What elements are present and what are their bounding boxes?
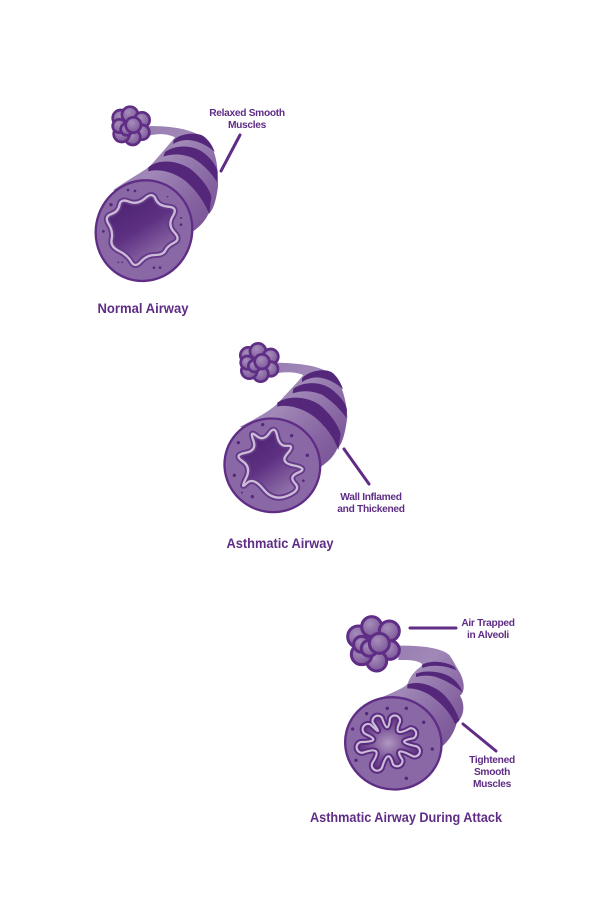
lumen dark edge bbox=[107, 195, 178, 265]
label: tightened smooth muscles: Muscles bbox=[473, 779, 512, 790]
icon: asthmatic alveoli cluster bbox=[240, 343, 278, 382]
lumen dark edge bbox=[357, 715, 420, 771]
dark muscle band top bbox=[422, 662, 457, 670]
lumen light lining bbox=[239, 430, 302, 498]
label: tightened smooth muscles: Smooth bbox=[474, 767, 510, 778]
label: relaxed smooth muscles: Muscles bbox=[228, 120, 267, 131]
tube outer wall bbox=[335, 686, 452, 800]
heading: asthmatic airway during attack: Asthmatic Airway During Attack bbox=[310, 809, 502, 825]
bronchus tube body bbox=[367, 646, 464, 748]
label: air trapped in alveoli: Air Trapped bbox=[461, 618, 515, 629]
dark muscle band middle bbox=[163, 146, 218, 182]
panel: asthmatic airway during attack bbox=[310, 617, 515, 825]
illustration: normal airway tube bbox=[82, 126, 218, 295]
dark muscle band middle bbox=[416, 671, 462, 692]
lumen dark edge bbox=[239, 430, 302, 498]
dark muscle band top bbox=[173, 134, 215, 152]
tube outer wall bbox=[211, 405, 333, 526]
dark muscle band top bbox=[302, 370, 343, 389]
heading: asthmatic airway: Asthmatic Airway bbox=[226, 535, 334, 551]
wall dots bbox=[233, 423, 309, 498]
dark muscle band lower bbox=[148, 161, 211, 214]
illustration: asthmatic airway tube bbox=[211, 363, 347, 526]
panel: normal airway bbox=[82, 107, 285, 316]
label line: wall inflamed bbox=[344, 449, 369, 484]
illustration: attack airway tube bbox=[335, 646, 464, 800]
label: relaxed smooth muscles: Relaxed Smooth bbox=[209, 108, 285, 119]
panel: asthmatic airway bbox=[211, 343, 405, 551]
label: tightened smooth muscles: Tightened bbox=[469, 755, 515, 766]
heading: normal airway: Normal Airway bbox=[98, 300, 189, 316]
dark muscle band lower bbox=[277, 398, 341, 450]
icon: normal alveoli cluster bbox=[113, 107, 150, 145]
tube outer wall bbox=[82, 167, 206, 295]
lumen light lining bbox=[107, 195, 178, 265]
lumen light lining bbox=[357, 715, 420, 771]
dark muscle band middle bbox=[293, 383, 347, 418]
bronchus tube body bbox=[240, 363, 347, 468]
label: wall inflamed and thickened: Wall Inflamed bbox=[340, 492, 402, 503]
label: wall inflamed and thickened: and Thickened bbox=[337, 504, 405, 515]
wall dots bbox=[102, 189, 182, 269]
icon: trapped air alveoli cluster bbox=[348, 617, 399, 671]
bronchus tube body bbox=[113, 126, 218, 233]
label line: tightened smooth muscles bbox=[463, 724, 496, 751]
dark muscle band lower bbox=[407, 683, 459, 724]
label line: air trapped bbox=[410, 626, 456, 630]
wall dots bbox=[351, 707, 434, 780]
label line: relaxed smooth muscles bbox=[221, 135, 240, 171]
label: air trapped in alveoli: in Alveoli bbox=[467, 630, 509, 641]
